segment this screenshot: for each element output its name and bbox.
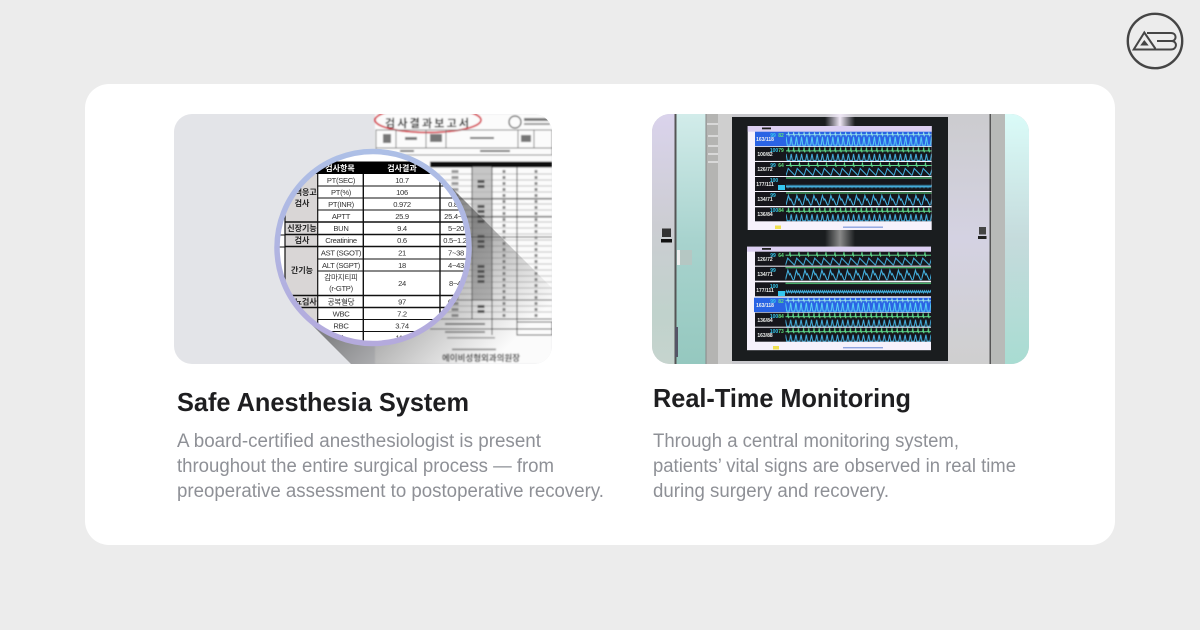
text block: monitoring description: patients’ vital signs are observed in real time bbox=[653, 456, 1016, 477]
upper monitor screen: 163/118 bbox=[756, 137, 774, 143]
magnifier lens with enlarged table: 8~4 bbox=[449, 279, 461, 288]
magnifier lens with enlarged table: 24 bbox=[398, 279, 406, 288]
magnifier lens with enlarged table: (r-GTP) bbox=[329, 284, 354, 293]
text block: anesthesia description bbox=[177, 431, 604, 502]
magnifier lens with enlarged table: Creatinine bbox=[325, 236, 357, 245]
lower monitor screen: 99 bbox=[770, 299, 776, 305]
magnifier lens with enlarged table: 0.8~ bbox=[448, 200, 463, 209]
magnifier lens with enlarged table: PT(INR) bbox=[328, 200, 355, 209]
magnifier lens with enlarged table: 25.9 bbox=[395, 212, 409, 221]
lower monitor screen: 64 bbox=[778, 253, 784, 259]
heading: Real-Time Monitoring: Real-Time Monitoring bbox=[653, 383, 911, 413]
text block: anesthesia description: throughout the entire surgical process — from bbox=[177, 456, 554, 477]
magnifier lens with enlarged table: WBC bbox=[333, 310, 350, 318]
magnifier lens with enlarged table: 검사항목 bbox=[325, 163, 355, 173]
magnifier lens with enlarged table: 25.4~3 bbox=[444, 212, 466, 221]
upper monitor screen: 100/82 bbox=[757, 152, 773, 158]
upper monitor screen: 100 bbox=[770, 148, 778, 154]
magnifier lens with enlarged table: 5~20 bbox=[448, 224, 464, 233]
upper monitor screen: 99 bbox=[770, 163, 776, 169]
magnifier lens with enlarged table: 0.972 bbox=[393, 200, 411, 209]
logo: AB in circle bbox=[1128, 14, 1182, 68]
upper monitor screen: 177/111 bbox=[756, 182, 774, 188]
magnifier lens with enlarged table: 7.2 bbox=[397, 310, 407, 318]
magnifier lens with enlarged table: ALT (SGPT) bbox=[322, 261, 361, 270]
magnifier lens with enlarged table: AST (SGOT) bbox=[321, 248, 362, 258]
lower monitor screen: 134/71 bbox=[757, 272, 773, 278]
upper monitor screen: 99 bbox=[770, 133, 776, 139]
magnifier lens with enlarged table: 4~43 bbox=[448, 261, 464, 270]
blurred lab report document bbox=[375, 108, 552, 364]
lower monitor screen: 99 bbox=[770, 253, 776, 259]
magnifier lens with enlarged table: 10.7 bbox=[395, 176, 409, 185]
upper monitor screen: 136/84 bbox=[757, 212, 773, 218]
lower monitor screen: 163/118 bbox=[756, 303, 774, 309]
magnifier lens with enlarged table: 검사 bbox=[295, 235, 310, 245]
text block: monitoring description: Through a central monitoring system, bbox=[653, 431, 959, 452]
lower monitor screen: 99 bbox=[770, 268, 776, 274]
magnifier lens with enlarged table: 7~38 bbox=[448, 248, 464, 258]
lower monitor screen: 100 bbox=[770, 284, 778, 290]
heading: Safe Anesthesia System: Safe Anesthesia System bbox=[177, 387, 469, 417]
upper monitor screen: 79 bbox=[778, 148, 784, 154]
door panels bbox=[652, 114, 1029, 364]
door signs bbox=[661, 239, 672, 242]
black display wall bbox=[732, 117, 948, 361]
panel: patient monitoring wall image bbox=[652, 114, 1029, 364]
upper monitor screen: 100 bbox=[770, 178, 778, 184]
magnifier lens with enlarged table: RBC bbox=[333, 322, 349, 330]
magnifier lens with enlarged table: 106 bbox=[396, 188, 408, 197]
hospital seal line: 에이비성형외과의원장 bbox=[442, 353, 520, 363]
upper monitor screen: 126/72 bbox=[757, 167, 773, 173]
magnifier lens with enlarged table: 0.6 bbox=[397, 236, 407, 245]
magnifier lens with enlarged table: 9.4 bbox=[397, 224, 407, 233]
magnifier lens with enlarged table: 검사결과 bbox=[387, 163, 417, 173]
magnifier lens with enlarged table: 70~ bbox=[449, 188, 462, 197]
magnifier lens with enlarged table: 0 bbox=[448, 298, 452, 306]
magnifier lens with enlarged table: 신장기능 bbox=[287, 223, 317, 233]
text block: anesthesia description: preoperative assessment to postoperative recovery. bbox=[177, 481, 604, 502]
lower monitor screen: 73 bbox=[778, 329, 784, 335]
lower monitor screen: 100 bbox=[770, 329, 778, 335]
lower monitor screen: 84 bbox=[778, 314, 784, 320]
upper monitor screen: 99 bbox=[770, 193, 776, 199]
magnifier lens with enlarged table: 21 bbox=[398, 248, 406, 258]
magnifier lens with enlarged table: 3.74 bbox=[395, 322, 409, 330]
upper monitor screen: 82 bbox=[778, 133, 784, 139]
panel: lab report image with magnifier bbox=[174, 114, 552, 364]
upper monitor screen: 84 bbox=[778, 208, 784, 214]
magnifier lens with enlarged table: 검사 bbox=[295, 198, 310, 208]
text block: monitoring description bbox=[653, 431, 1016, 502]
lower monitor screen bbox=[747, 247, 931, 350]
magnifier lens with enlarged table: 18 bbox=[398, 261, 406, 270]
upper monitor screen: 100 bbox=[770, 208, 778, 214]
magnifier ring bbox=[277, 152, 469, 344]
magnifier lens with enlarged table: 간기능 bbox=[291, 265, 314, 275]
document table bbox=[430, 162, 552, 168]
magnifier lens with enlarged table: 당뇨검사 bbox=[287, 296, 317, 306]
magnifier lens with enlarged table: 공복혈당 bbox=[328, 296, 355, 306]
report title: 검사결과보고서 bbox=[385, 116, 469, 130]
lower monitor screen: 163/88 bbox=[757, 333, 773, 339]
lower monitor screen: 177/111 bbox=[756, 288, 774, 294]
upper monitor screen bbox=[748, 126, 932, 230]
text block: monitoring description: during surgery and recovery. bbox=[653, 481, 889, 502]
lower monitor screen: 126/72 bbox=[757, 257, 773, 263]
upper monitor screen: 64 bbox=[778, 163, 784, 169]
magnifier cast shadow bbox=[312, 186, 550, 364]
magnifier lens with enlarged table: 감마지티피 bbox=[324, 272, 358, 282]
upper monitor screen: 134/71 bbox=[757, 197, 773, 203]
main white card bbox=[85, 84, 1115, 545]
magnifier lens with enlarged table: 혈액응고 bbox=[287, 187, 317, 197]
magnifier lens with enlarged table: PT(SEC) bbox=[327, 176, 356, 185]
magnifier lens with enlarged table bbox=[275, 152, 470, 348]
lower monitor screen: 100 bbox=[770, 314, 778, 320]
text block: anesthesia description: A board-certified anesthesiologist is present bbox=[177, 431, 542, 452]
magnifier lens with enlarged table: BUN bbox=[333, 224, 349, 233]
magnifier lens with enlarged table: 0.5~1.2 bbox=[443, 236, 467, 245]
lower monitor screen: 136/84 bbox=[757, 318, 773, 324]
magnifier lens with enlarged table: 11.9 bbox=[395, 334, 409, 342]
magnifier lens with enlarged table: APTT bbox=[332, 212, 351, 221]
magnifier lens with enlarged table: Hb bbox=[336, 334, 346, 342]
lower monitor screen: 82 bbox=[778, 299, 784, 305]
magnifier lens with enlarged table: 97 bbox=[398, 298, 406, 306]
magnifier lens with enlarged table: PT(%) bbox=[331, 188, 352, 197]
